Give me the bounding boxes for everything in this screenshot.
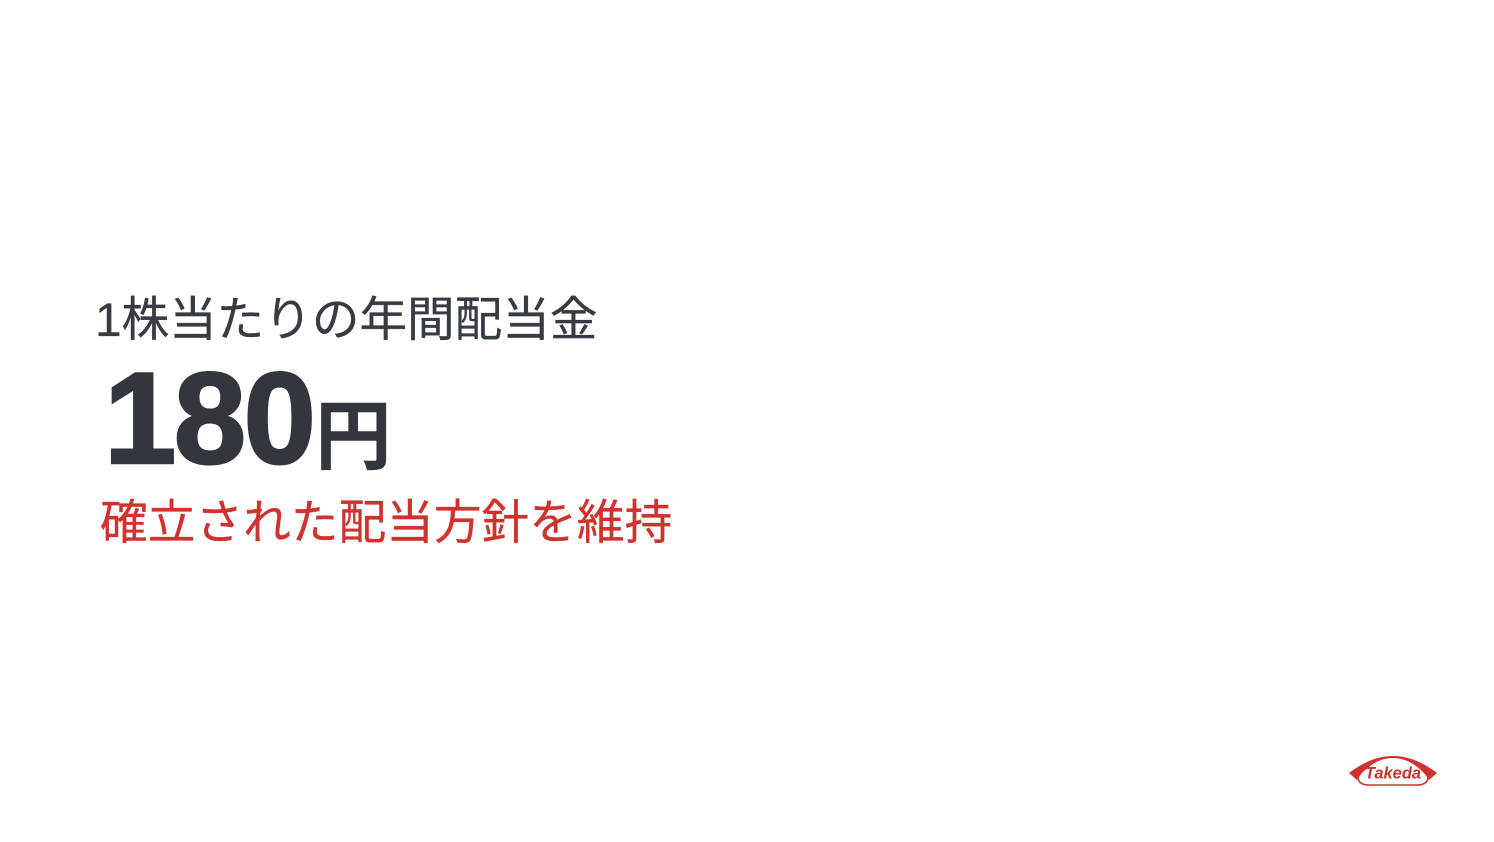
key figure: 180 yen: 180円 bbox=[104, 345, 391, 491]
subheading: policy statement: 確立された配当方針を維持 bbox=[100, 497, 672, 550]
logo: Takeda bbox=[1349, 756, 1437, 786]
heading: annual dividend per share: 1株当たりの年間配当金 bbox=[95, 294, 597, 347]
logo: Takeda: Takeda bbox=[1365, 764, 1421, 782]
